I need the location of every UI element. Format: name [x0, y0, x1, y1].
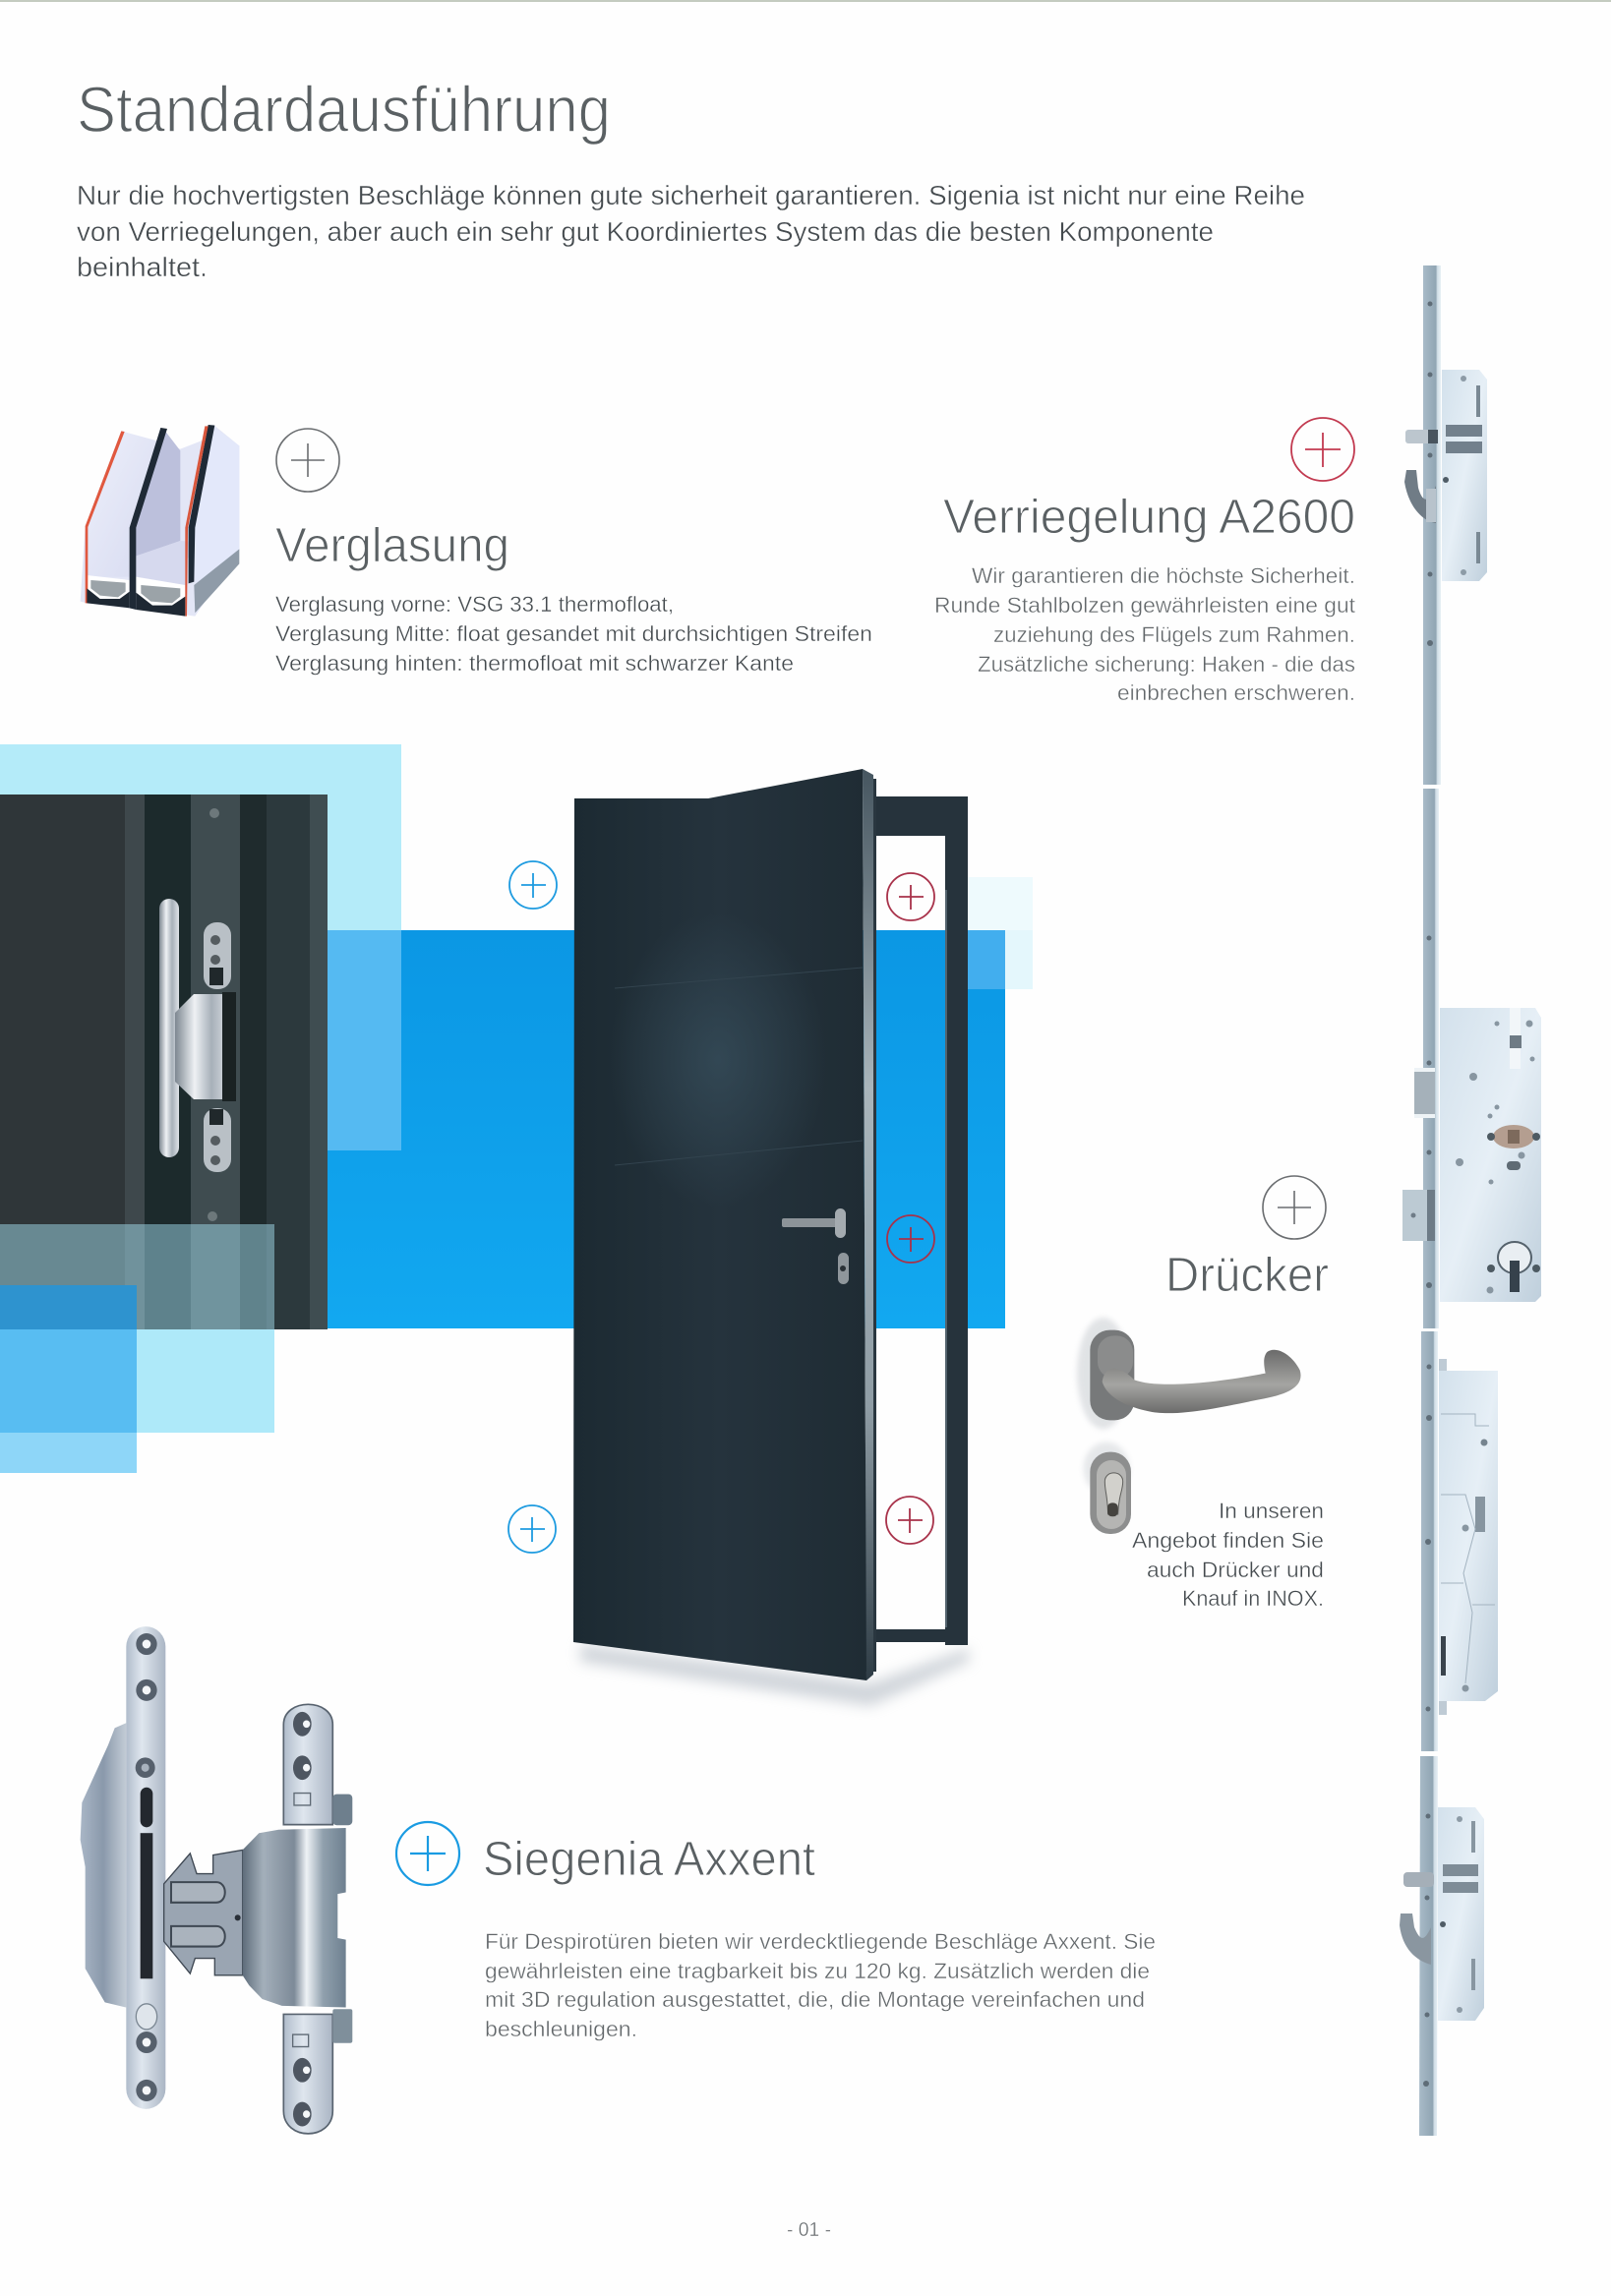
photo: dark door with frame — [573, 769, 969, 1706]
blue background band — [328, 930, 1005, 1328]
lock case bottom hook — [1400, 1807, 1484, 2021]
text: glazing description: Verglasung hinten: thermofloat mit schwarzer Kante — [275, 651, 794, 676]
text: handle description: auch Drücker und — [1147, 1558, 1324, 1582]
text: locking description — [934, 563, 1356, 705]
text: locking description: zuziehung des Flügels zum Rahmen. — [993, 622, 1355, 647]
heading: Verriegelung A2600: Verriegelung A2600 — [943, 491, 1355, 544]
marker: red plus bottom — [886, 1497, 933, 1544]
icon: grey plus circle — [276, 429, 339, 492]
icon: concealed hinge Siegenia Axxent — [81, 1626, 352, 2134]
marker: blue plus top — [509, 861, 557, 909]
text: handle description: Angebot finden Sie — [1132, 1528, 1324, 1553]
hinge hardware — [159, 899, 236, 1172]
icon: triple glazing cross-section — [81, 425, 239, 617]
door lever handle — [782, 1208, 849, 1284]
heading group: Drücker — [1165, 1176, 1329, 1302]
door frame — [574, 796, 968, 1672]
heading group: Siegenia Axxent — [396, 1822, 1156, 2041]
marker: red plus middle — [887, 1215, 934, 1263]
door edge — [863, 769, 873, 1680]
heading group: Verglasung — [275, 429, 872, 676]
heading: Drücker: Drücker — [1165, 1249, 1329, 1302]
text: hinge description: mit 3D regulation ausgestattet, die, die Montage vereinfachen und — [485, 1987, 1145, 2012]
marker: red plus top — [887, 873, 934, 920]
heading: Siegenia Axxent: Siegenia Axxent — [483, 1833, 815, 1886]
text: glazing description — [275, 592, 872, 676]
strip segments — [1419, 265, 1441, 2136]
multipoint lock strip — [1400, 265, 1541, 2136]
text: locking description: Runde Stahlbolzen gewährleisten eine gut — [934, 593, 1356, 618]
text: hinge description: Für Despirotüren bieten wir verdecktliegende Beschläge Axxent. Sie — [485, 1929, 1156, 1954]
page number: - 01 - — [787, 2219, 831, 2241]
light square right of door — [968, 877, 1033, 989]
door shadow — [580, 1644, 969, 1706]
text: glazing description: Verglasung vorne: VSG 33.1 thermofloat, — [275, 592, 674, 617]
text: locking description: einbrechen erschweren. — [1117, 680, 1355, 705]
text: locking description: Wir garantieren die höchste Sicherheit. — [972, 563, 1355, 588]
text: glazing description: Verglasung Mitte: float gesandet mit durchsichtigen Streifen — [275, 621, 872, 646]
overlay: light blue square bottom left — [0, 1224, 274, 1473]
text: handle description — [1132, 1499, 1324, 1611]
intro text block: Nur die hochvertigsten Beschläge können gute sicherheit garantieren. Sigenia ist nicht nur eine Reihe — [77, 180, 1305, 210]
text: hinge description: beschleunigen. — [485, 2017, 637, 2041]
lock case lower — [1439, 1359, 1498, 1715]
text: handle description: Knauf in INOX. — [1182, 1586, 1324, 1611]
text: hinge description: gewährleisten eine tragbarkeit bis zu 120 kg. Zusätzlich werden die — [485, 1959, 1150, 1983]
hotspot markers on door — [508, 861, 934, 1553]
overlay: mid blue square bottom left — [0, 1285, 137, 1473]
intro text block: von Verriegelungen, aber auch ein sehr gut Koordiniertes System das die besten Komponente — [77, 216, 1214, 247]
door leaf — [573, 769, 866, 1680]
lock case upper hook — [1404, 370, 1487, 581]
text: handle description: In unseren — [1219, 1499, 1324, 1523]
text: locking description: Zusätzliche sicherung: Haken - die das — [978, 652, 1355, 677]
icon: blue plus circle — [396, 1822, 459, 1885]
icon: red plus circle — [1291, 418, 1354, 481]
panel: light blue square top left — [0, 744, 401, 1150]
icon: grey plus circle — [1263, 1176, 1326, 1239]
intro text block: beinhaltet. — [77, 252, 208, 282]
heading: Verglasung: Verglasung — [275, 519, 509, 572]
marker: blue plus bottom — [508, 1505, 556, 1553]
title: Standardausführung — [77, 73, 611, 146]
icon: door handle and cylinder rose — [1077, 1318, 1301, 1534]
heading group: Verriegelung A2600 — [934, 418, 1356, 705]
photo: hinge detail in dark door profile — [0, 795, 328, 1329]
intro text block — [77, 180, 1305, 282]
text: hinge description — [485, 1929, 1156, 2041]
lock case centre with cylinder — [1402, 1008, 1541, 1302]
strip screw holes — [1423, 301, 1433, 2087]
